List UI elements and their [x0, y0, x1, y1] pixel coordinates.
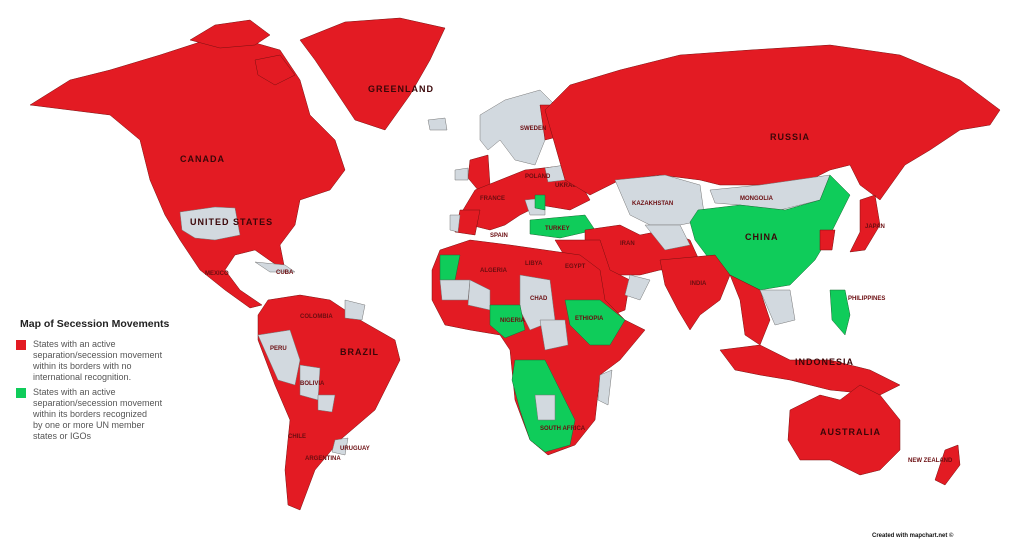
region: africa: SOUTH AFRICA [540, 426, 586, 432]
credit: Created with mapchart.net © [872, 532, 954, 539]
region: africa [432, 240, 645, 455]
region: russia and asia [530, 45, 1000, 345]
legend: red: States with an active [33, 339, 116, 349]
region: europe [428, 90, 590, 239]
region: europe: SPAIN [490, 233, 508, 239]
region: north america: GREENLAND [368, 84, 434, 94]
legend: green [16, 387, 163, 441]
region: south america: BRAZIL [340, 347, 379, 357]
region: south america: COLOMBIA [300, 314, 333, 320]
region: africa: CHAD [530, 296, 548, 302]
region: africa: NIGERIA [500, 318, 526, 324]
region: south america [258, 295, 400, 510]
region: oceania: NEW ZEALAND [908, 458, 953, 464]
region: russia and asia: PHILIPPINES [848, 296, 885, 302]
region: south america: URUGUAY [340, 446, 370, 452]
legend: red: within its borders with no [32, 361, 132, 371]
region: europe: FRANCE [480, 196, 505, 202]
legend: red: separation/secession movement [33, 350, 163, 360]
legend: red [16, 339, 163, 382]
legend [16, 318, 170, 441]
region: russia and asia: KAZAKHSTAN [632, 201, 673, 207]
region: north america: CUBA [276, 270, 294, 276]
region: north america: UNITED STATES [190, 217, 273, 227]
region: south america: ARGENTINA [305, 456, 341, 462]
region: south america: BOLIVIA [300, 381, 325, 387]
legend: green: within its borders recognized [32, 409, 147, 419]
region: south america: PERU [270, 346, 287, 352]
region: russia and asia: INDIA [690, 281, 707, 287]
legend: green: States with an active [33, 387, 116, 397]
legend: green: by one or more UN member [33, 420, 145, 430]
region: europe: UKRAINE [555, 183, 582, 189]
region: north america: MEXICO [205, 271, 229, 277]
region: africa: ALGERIA [480, 268, 508, 274]
region: africa: ETHIOPIA [575, 316, 604, 322]
region: europe: SWEDEN [520, 126, 546, 132]
region: oceania [720, 345, 960, 485]
legend: green: states or IGOs [33, 431, 92, 441]
region: russia and asia: IRAN [620, 241, 635, 247]
region: south america: CHILE [288, 434, 306, 440]
legend: green: separation/secession movement [33, 398, 163, 408]
region: north america [30, 18, 445, 308]
region: oceania: INDONESIA [795, 357, 854, 367]
region: russia and asia: JAPAN [865, 224, 885, 230]
region: russia and asia: TURKEY [545, 226, 570, 232]
region: russia and asia: MONGOLIA [740, 196, 774, 202]
region: europe: POLAND [525, 174, 551, 180]
region: oceania: AUSTRALIA [820, 427, 881, 437]
legend: red: international recognition. [33, 372, 131, 382]
region: north america: CANADA [180, 154, 225, 164]
legend: Map of Secession Movements [20, 318, 170, 330]
region: africa: EGYPT [565, 264, 586, 270]
region: russia and asia: RUSSIA [770, 132, 810, 142]
region: africa: LIBYA [525, 261, 543, 267]
region: russia and asia: CHINA [745, 232, 778, 242]
